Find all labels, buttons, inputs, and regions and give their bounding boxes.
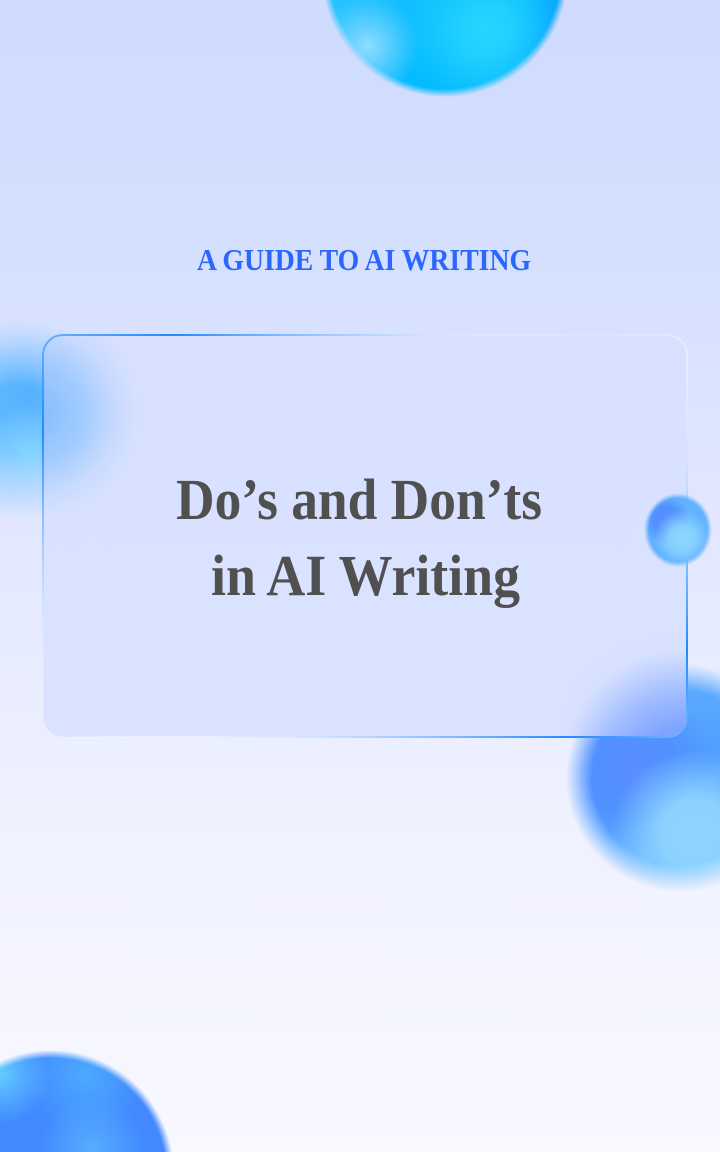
title bbox=[176, 467, 542, 608]
kicker heading: A GUIDE TO AI WRITING bbox=[197, 242, 531, 277]
sphere: left bbox=[0, 326, 60, 514]
glass card bbox=[43, 335, 687, 737]
sphere: top bbox=[320, 0, 570, 100]
sphere: small right bbox=[644, 494, 712, 566]
sphere: bottom left bbox=[0, 1048, 176, 1152]
title: in AI Writing bbox=[211, 543, 520, 608]
sphere: lower right bbox=[568, 666, 720, 890]
title: Do’s and Don’ts bbox=[176, 467, 542, 532]
card outline bbox=[43, 335, 687, 737]
